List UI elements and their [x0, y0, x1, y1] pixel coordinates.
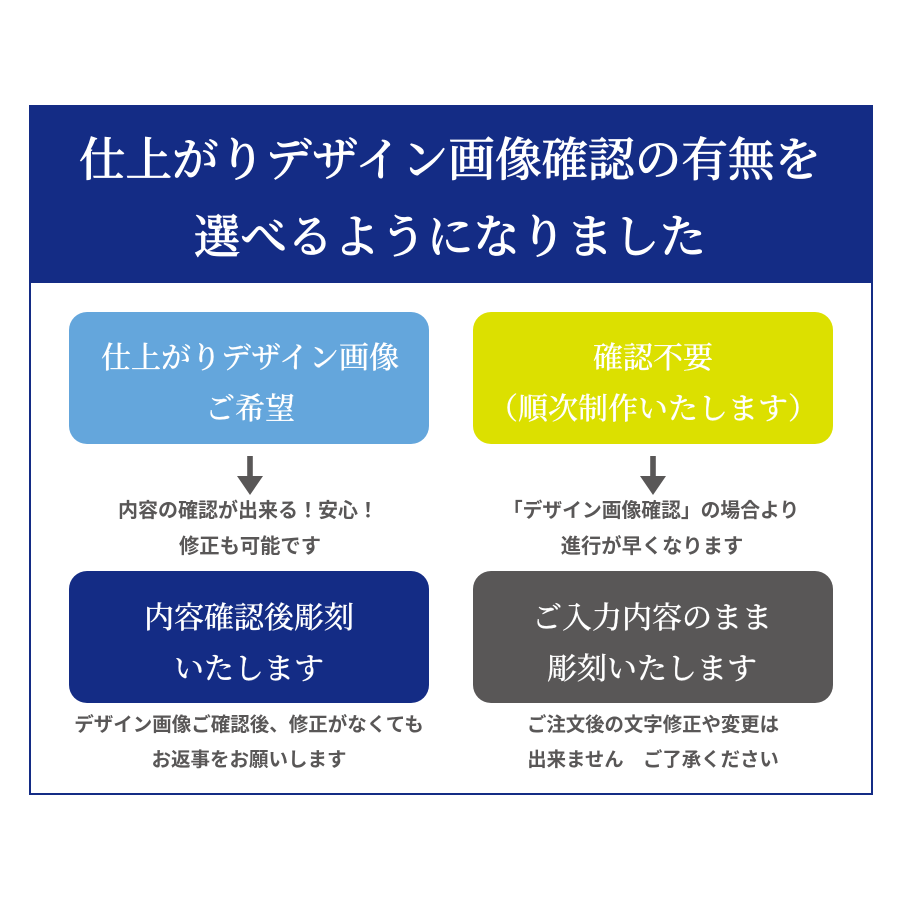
panel text line 2: いたします — [174, 653, 324, 686]
text: left bottom note: デザイン画像ご確認後、修正がなくても — [74, 714, 424, 736]
text: left note: 内容の確認が出来る！安心！ — [118, 500, 378, 522]
panel text line 2: 彫刻いたします — [547, 653, 757, 686]
title banner — [30, 106, 873, 283]
panel text: 内容確認後彫刻 — [144, 602, 354, 635]
text: left bottom note line 2: お返事をお願いします — [151, 749, 347, 771]
icon: left arrow — [237, 456, 263, 495]
outer frame — [29, 105, 873, 795]
panel: engrave after confirmation — [69, 571, 429, 703]
title line 1: 仕上がりデザイン画像確認の有無を — [79, 135, 821, 187]
text: right note: 「デザイン画像確認」の場合より — [503, 500, 799, 522]
text: right note line 2: 進行が早くなります — [561, 536, 743, 558]
text: right bottom note line 2: 出来ません ご了承ください — [527, 749, 779, 771]
panel text line 2: ご希望 — [205, 393, 295, 426]
title line 2: 選べるようになりました — [194, 212, 706, 264]
panel: no confirmation needed — [473, 312, 833, 444]
panel: design image requested — [69, 312, 429, 444]
text: left note line 2: 修正も可能です — [179, 536, 321, 558]
panel text: ご入力内容のまま — [532, 602, 772, 635]
panel text: 仕上がりデザイン画像 — [101, 342, 399, 375]
panel text: 確認不要 — [593, 342, 713, 375]
icon: right arrow — [640, 456, 666, 495]
panel text line 2: （順次制作いたします） — [488, 393, 818, 426]
panel: engrave as entered — [473, 571, 833, 703]
text: right bottom note: ご注文後の文字修正や変更は — [527, 714, 779, 736]
